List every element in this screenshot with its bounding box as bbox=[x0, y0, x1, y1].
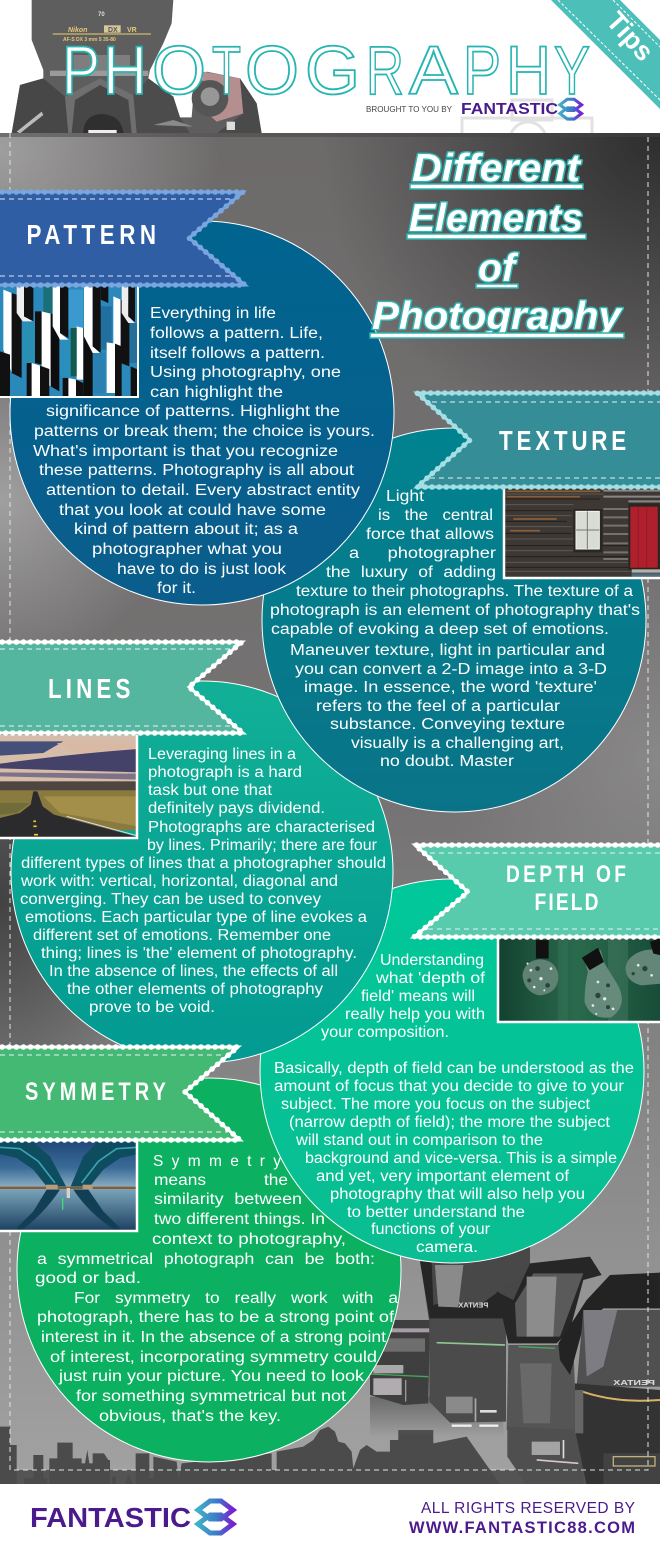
title: PHOTOGRAPHY: R bbox=[366, 32, 404, 109]
ribbon: DEPTH OF FIELD: FIELD bbox=[534, 888, 599, 916]
ribbon: SYMMETRY bbox=[0, 1047, 240, 1140]
pattern text: attention to detail. Every abstract entity bbox=[46, 482, 360, 499]
title: PHOTOGRAPHY: H bbox=[103, 32, 147, 109]
icon: fantastic logo bbox=[198, 1501, 233, 1533]
photo: building pattern bbox=[0, 283, 138, 399]
lines text: prove to be void. bbox=[89, 999, 215, 1016]
heading: Different Elements of Photography: of bbox=[478, 247, 519, 290]
icon: camera watermark bbox=[462, 100, 592, 158]
symmetry text: For symmetry to really work with a bbox=[74, 1290, 398, 1307]
title: PHOTOGRAPHY: T bbox=[212, 32, 241, 109]
lines text: by lines. Primarily; there are four bbox=[147, 837, 377, 854]
title: PHOTOGRAPHY: A bbox=[409, 32, 458, 109]
texture text: image. In essence, the word 'texture' bbox=[304, 679, 597, 696]
pattern text: for it. bbox=[157, 580, 196, 597]
heading: Different Elements of Photography: Photography bbox=[372, 295, 623, 338]
rights text: ALL RIGHTS RESERVED BY bbox=[421, 1500, 635, 1517]
pattern text: Everything in life bbox=[150, 305, 276, 322]
lines text: different set of emotions. Remember one bbox=[33, 927, 331, 944]
footer bbox=[0, 1484, 660, 1550]
title: PHOTOGRAPHY: G bbox=[305, 32, 360, 109]
title: PHOTOGRAPHY bbox=[62, 32, 590, 109]
pattern text: can highlight the bbox=[150, 384, 283, 401]
brought to you by bbox=[366, 101, 558, 118]
photo: wooden house bbox=[500, 484, 660, 580]
title: PHOTOGRAPHY: O bbox=[152, 32, 206, 109]
lines text: Photographs are characterised bbox=[148, 819, 375, 836]
depth of field text: background and vice-versa. This is a simple bbox=[305, 1150, 617, 1167]
lines text: different types of lines that a photographer should bbox=[21, 855, 386, 872]
texture text: capable of evoking a deep set of emotions. bbox=[271, 621, 609, 638]
texture text: is the central bbox=[378, 507, 493, 524]
symmetry text: just ruin your picture. You need to look bbox=[58, 1368, 364, 1385]
texture text: visually is a challenging art, bbox=[351, 735, 564, 752]
texture text: you can convert a 2-D image into a 3-D bbox=[295, 661, 607, 678]
title: PHOTOGRAPHY: P bbox=[463, 32, 501, 109]
texture text: a photographer bbox=[349, 545, 496, 562]
brought to you by: FANTASTIC bbox=[461, 101, 558, 118]
depth of field text: Understanding bbox=[380, 952, 484, 969]
photo: bridge reflection bbox=[0, 1138, 138, 1231]
rights text bbox=[409, 1500, 635, 1537]
title: PHOTOGRAPHY: P bbox=[62, 32, 100, 109]
panel: texture bbox=[262, 428, 646, 812]
depth of field text: what 'depth of bbox=[375, 970, 486, 987]
depth of field text: functions of your bbox=[371, 1221, 490, 1238]
title: PHOTOGRAPHY: H bbox=[506, 32, 551, 109]
pattern text: significance of patterns. Highlight the bbox=[46, 403, 340, 420]
lines text: definitely pays dividend. bbox=[148, 800, 325, 817]
heading: Different Elements of Photography bbox=[370, 147, 624, 338]
lens 3 bbox=[497, 1257, 602, 1485]
panel: lines bbox=[11, 681, 393, 1063]
pattern text: Using photography, one bbox=[150, 364, 341, 381]
texture text: Light bbox=[386, 488, 425, 505]
camera display labels: AF-S DX 3 mm 5 35-80 bbox=[63, 37, 116, 43]
ribbon: TEXTURE: TEXTURE bbox=[499, 426, 626, 457]
ribbon: Tips: Tips bbox=[601, 6, 660, 67]
lines text: Leveraging lines in a bbox=[148, 746, 296, 763]
symmetry text: similarity between bbox=[154, 1191, 302, 1208]
ribbon: SYMMETRY: SYMMETRY bbox=[25, 1078, 166, 1106]
depth of field text bbox=[274, 952, 634, 1256]
lines text: photograph is a hard bbox=[148, 764, 302, 781]
texture text: substance. Conveying texture bbox=[330, 716, 565, 733]
lines text: converging. They can be used to convey bbox=[20, 891, 321, 908]
ribbon: LINES bbox=[0, 642, 243, 733]
lines text: task but one that bbox=[148, 782, 273, 799]
rights text: WWW.FANTASTIC88.COM bbox=[409, 1519, 635, 1537]
pattern text: kind of pattern about it; as a bbox=[74, 521, 298, 538]
texture text: the luxury of adding bbox=[326, 564, 496, 581]
lines text: the other elements of photography bbox=[67, 981, 323, 998]
ribbon: DEPTH OF FIELD bbox=[414, 845, 660, 937]
ribbon: PATTERN bbox=[0, 192, 245, 285]
symmetry text bbox=[35, 1153, 398, 1425]
pattern text: follows a pattern. Life, bbox=[150, 325, 323, 342]
pattern text: patterns or break them; the choice is yours. bbox=[34, 423, 375, 440]
heading: Different Elements of Photography: Different bbox=[412, 147, 582, 190]
skyline silhouette bbox=[0, 1427, 660, 1484]
depth of field text: photography that will also help you bbox=[330, 1186, 585, 1203]
title: PHOTOGRAPHY: O bbox=[245, 32, 299, 109]
depth of field text: Basically, depth of field can be understood as the bbox=[274, 1060, 634, 1077]
camera display labels: 70 bbox=[98, 12, 105, 18]
panel: symmetry bbox=[17, 1078, 401, 1462]
lines text: emotions. Each particular type of line evokes a bbox=[25, 909, 367, 926]
pattern text: photographer what you bbox=[92, 541, 282, 558]
depth of field text: really help you with bbox=[345, 1006, 485, 1023]
photo: road landscape bbox=[0, 733, 138, 838]
lens 1 bbox=[370, 1320, 430, 1405]
depth of field text: subject. The more you focus on the subject bbox=[281, 1096, 591, 1113]
texture text: Maneuver texture, light in particular and bbox=[290, 642, 605, 659]
panel: pattern bbox=[10, 221, 394, 605]
icon: fantastic logo small bbox=[560, 99, 582, 119]
lens 2: PENTAX bbox=[458, 1300, 488, 1309]
symmetry text: context to photography, bbox=[152, 1231, 346, 1248]
pattern text: have to do is just look bbox=[117, 561, 286, 578]
heading: Different Elements of Photography: Elements bbox=[409, 197, 583, 240]
depth of field text: will stand out in comparison to the bbox=[295, 1132, 543, 1149]
pattern text: itself follows a pattern. bbox=[150, 345, 325, 362]
photo: camera silhouette bbox=[12, 0, 262, 133]
lens 4: PENTAX bbox=[613, 1378, 655, 1387]
camera display labels: VR bbox=[127, 27, 137, 34]
photo: camera lenses bbox=[370, 1247, 660, 1485]
texture text: refers to the feel of a particular bbox=[316, 698, 560, 715]
lines text: work with: vertical, horizontal, diagonal and bbox=[20, 873, 338, 890]
footer logo wordmark: FANTASTIC bbox=[30, 1502, 191, 1533]
depth of field text: your composition. bbox=[321, 1024, 449, 1041]
symmetry text: for something symmetrical but not bbox=[76, 1388, 347, 1405]
lens 2 bbox=[420, 1247, 530, 1426]
pattern text bbox=[33, 305, 375, 597]
depth of field text: to better understand the bbox=[347, 1204, 525, 1221]
lines text bbox=[20, 746, 386, 1016]
texture text: no doubt. Master bbox=[380, 753, 514, 770]
photo: light bulbs bbox=[494, 935, 660, 1026]
ribbon: LINES: LINES bbox=[48, 674, 130, 705]
lens 4 bbox=[558, 1273, 660, 1485]
ribbon: PATTERN: PATTERN bbox=[26, 220, 156, 251]
texture text: force that allows bbox=[366, 526, 494, 543]
pattern text: these patterns. Photography is all about bbox=[39, 462, 355, 479]
symmetry text: the bbox=[264, 1172, 288, 1189]
title: PHOTOGRAPHY: Y bbox=[554, 32, 590, 109]
ribbon: DEPTH OF FIELD: DEPTH OF bbox=[506, 860, 626, 888]
pattern text: What's important is that you recognize bbox=[33, 443, 338, 460]
depth of field text: (narrow depth of field); the more the subject bbox=[289, 1114, 611, 1131]
camera display labels bbox=[63, 12, 137, 43]
depth of field text: field' means will bbox=[361, 988, 475, 1005]
texture text bbox=[270, 488, 640, 770]
camera display labels: DX bbox=[108, 27, 118, 34]
camera display labels: Nikon bbox=[68, 27, 87, 34]
texture text: texture to their photographs. The texture of a bbox=[296, 583, 633, 600]
symmetry text: Symmetry bbox=[153, 1153, 281, 1170]
symmetry text: interest in it. In the absence of a strong point bbox=[41, 1329, 387, 1346]
depth of field text: amount of focus that you decide to give to your bbox=[274, 1078, 624, 1095]
lines text: thing; lines is 'the' element of photography. bbox=[41, 945, 357, 962]
symmetry text: obvious, that's the key. bbox=[99, 1408, 281, 1425]
ribbon: TEXTURE bbox=[417, 393, 660, 487]
lines text: In the absence of lines, the effects of all bbox=[49, 963, 338, 980]
texture text: photograph is an element of photography that's bbox=[270, 602, 640, 619]
symmetry text: means bbox=[154, 1172, 206, 1189]
pattern text: that you look at could have some bbox=[59, 502, 326, 519]
ribbon: Tips bbox=[551, 0, 660, 109]
symmetry text: of interest, incorporating symmetry could bbox=[50, 1349, 377, 1366]
symmetry text: two different things. In bbox=[154, 1211, 325, 1228]
panel: depth of field bbox=[260, 879, 644, 1263]
symmetry text: a symmetrical photograph can be both: bbox=[37, 1251, 375, 1268]
symmetry text: photograph, there has to be a strong point of bbox=[37, 1309, 395, 1326]
symmetry text: good or bad. bbox=[35, 1270, 141, 1287]
depth of field text: and yet, very important element of bbox=[316, 1168, 570, 1185]
header background bbox=[0, 0, 660, 133]
brought to you by: BROUGHT TO YOU BY bbox=[366, 104, 452, 114]
depth of field text: camera. bbox=[416, 1239, 478, 1256]
